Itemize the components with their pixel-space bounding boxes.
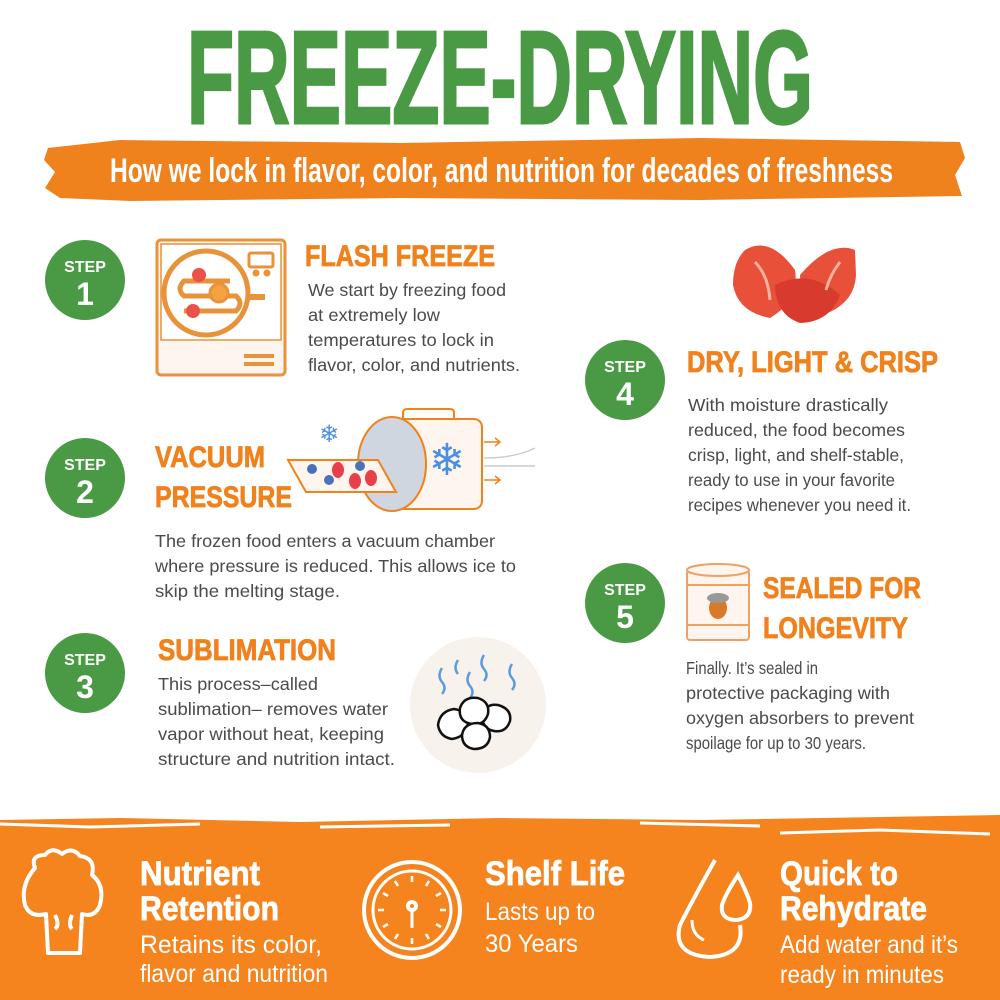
text: step 1: temperatures to lock in	[308, 330, 494, 350]
text: step 4: reduced, the food becomes	[688, 420, 905, 440]
text: step 2	[154, 531, 516, 601]
heading: sublimation: SUBLIMATION	[158, 634, 336, 667]
step 1 badge	[45, 240, 125, 320]
text: step 5: spoilage for up to 30 years.	[686, 733, 866, 753]
text: shelf life: 30 Years	[485, 930, 578, 958]
bottom band	[0, 815, 1000, 1000]
text: quick to rehydrate: Rehydrate	[780, 890, 927, 928]
text: nutrient retention: Nutrient	[140, 855, 260, 893]
step 1 badge: 1	[76, 276, 94, 312]
icon: vacuum chamber	[288, 409, 535, 511]
heading: sealed for longevity	[763, 572, 921, 645]
text: step 1: We start by freezing food	[308, 280, 506, 300]
step 3 badge	[45, 633, 125, 713]
text: step 3: This process–called	[158, 674, 318, 694]
text: shelf life: Lasts up to	[485, 898, 595, 926]
step 4 badge: 4	[616, 376, 634, 412]
subtitle banner	[44, 138, 965, 201]
text: quick to rehydrate: ready in minutes	[780, 961, 944, 989]
text: nutrient retention: Retention	[140, 890, 279, 928]
text: nutrient retention: Retains its color,	[140, 931, 322, 959]
heading: vacuum pressure: PRESSURE	[155, 481, 292, 514]
step 5 badge	[585, 563, 665, 643]
text: quick to rehydrate	[780, 855, 958, 989]
text: shelf life: Shelf Life	[485, 855, 625, 893]
step 3 badge: STEP	[64, 652, 106, 669]
text: step 5: oxygen absorbers to prevent	[686, 708, 914, 728]
text: step 5: Finally. It’s sealed in	[686, 658, 818, 678]
heading: sealed for longevity: SEALED FOR	[763, 572, 921, 605]
text: step 3: structure and nutrition intact.	[158, 749, 395, 769]
text: step 2: where pressure is reduced. This allows ice to	[154, 556, 516, 576]
heading: vacuum pressure	[155, 441, 292, 514]
icon: broccoli	[24, 850, 101, 953]
step 3 badge: 3	[76, 669, 94, 705]
icon: vacuum chamber: ❄	[429, 435, 465, 486]
text: shelf life	[485, 855, 625, 958]
step 1 badge: STEP	[64, 259, 106, 276]
icon: can	[687, 564, 749, 640]
step 5 badge: STEP	[604, 582, 646, 599]
text: step 2: The frozen food enters a vacuum chamber	[155, 531, 495, 551]
heading: flash freeze: FLASH FREEZE	[305, 240, 495, 273]
heading: vacuum pressure: VACUUM	[155, 441, 265, 474]
heading: sealed for longevity: LONGEVITY	[763, 612, 908, 645]
icon: water drops	[679, 860, 750, 957]
text: step 1: flavor, color, and nutrients.	[308, 355, 520, 375]
step 2 badge: 2	[76, 474, 94, 510]
icon: strawberries	[733, 246, 856, 323]
text: step 3	[158, 674, 395, 769]
text: nutrient retention: flavor and nutrition	[140, 960, 328, 988]
step 4 badge	[585, 340, 665, 420]
text: step 4: recipes whenever you need it.	[688, 495, 911, 515]
text: nutrient retention	[140, 855, 328, 988]
text: step 1	[308, 280, 520, 375]
step 2 badge: STEP	[64, 457, 106, 474]
text: step 4	[688, 395, 911, 515]
text: quick to rehydrate: Add water and it’s	[780, 931, 958, 959]
text: step 2: skip the melting stage.	[155, 581, 340, 601]
icon: clock	[364, 862, 460, 958]
text: step 4: With moisture drastically	[688, 395, 888, 415]
icon: vacuum chamber: ❄	[319, 420, 339, 448]
heading: dry light crisp: DRY, LIGHT & CRISP	[687, 346, 938, 379]
text: step 4: crisp, light, and shelf-stable,	[688, 445, 904, 465]
text: step 3: vapor without heat, keeping	[158, 724, 384, 744]
text: quick to rehydrate: Quick to	[780, 855, 898, 893]
text: step 5	[686, 658, 914, 753]
icon: sublimation	[410, 637, 546, 773]
text: step 4: ready to use in your favorite	[688, 470, 895, 490]
step 2 badge	[45, 438, 125, 518]
icon: freezer	[157, 240, 285, 375]
text: step 1: at extremely low	[308, 305, 440, 325]
step 5 badge: 5	[616, 599, 634, 635]
text: step 3: sublimation– removes water	[158, 699, 388, 719]
step 4 badge: STEP	[604, 359, 646, 376]
text: step 5: protective packaging with	[686, 683, 890, 703]
